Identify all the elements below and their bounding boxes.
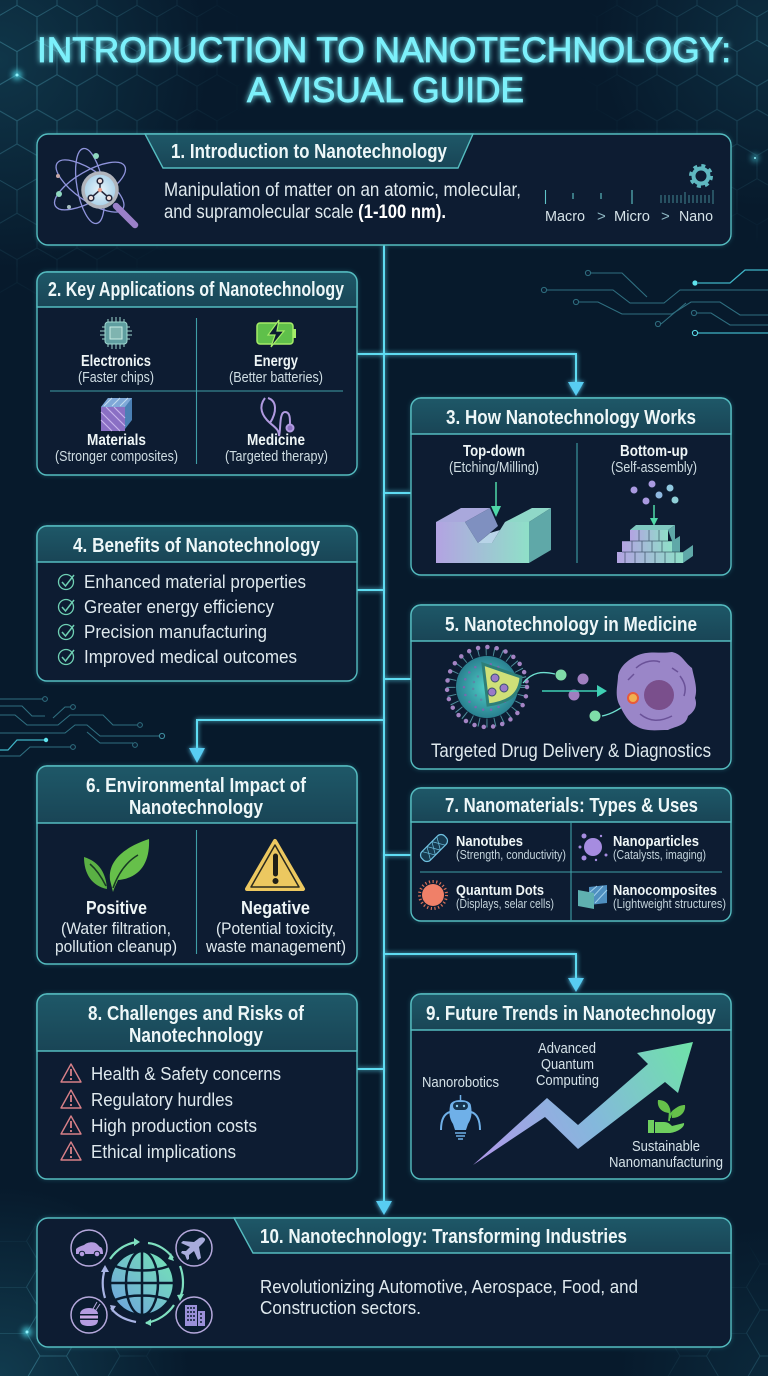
heading 1: 1. Introduction to Nanotechnology	[171, 141, 448, 163]
heading 2: 2. Key Applications of Nanotechnology	[48, 279, 345, 301]
sustainable nanomanufacturing: Nanomanufacturing	[609, 1154, 723, 1171]
circuit decoration: left	[0, 697, 165, 756]
energy: (Better batteries)	[229, 370, 323, 386]
trend arrow	[473, 1042, 693, 1165]
benefit 1: Enhanced material properties	[84, 571, 306, 592]
icon: hand and plant	[648, 1100, 685, 1133]
description: Revolutionizing Automotive, Aerospace, Food, and	[260, 1276, 638, 1297]
intro text	[164, 179, 521, 223]
heading 8	[37, 994, 357, 1051]
nanotubes: (Strength, conductivity)	[456, 848, 566, 862]
heading 7	[411, 788, 731, 822]
icon: warning triangle	[247, 841, 303, 889]
positive: pollution cleanup)	[55, 937, 177, 956]
icon: assembled bricks	[617, 480, 693, 563]
intro text: Manipulation of matter on an atomic, molecular,	[164, 179, 521, 201]
materials: Materials	[87, 432, 146, 449]
panel 4: benefits	[37, 526, 357, 681]
materials: (Stronger composites)	[55, 449, 178, 465]
nanotubes	[418, 832, 566, 864]
quantum dots: (Displays, selar cells)	[456, 897, 554, 911]
icon: target cell	[617, 652, 696, 730]
panel 2: key applications	[37, 272, 357, 475]
icon: chip	[100, 317, 132, 349]
risk 3: High production costs	[91, 1115, 257, 1136]
icon: nanoparticles	[578, 834, 608, 861]
bottom-up: (Self-assembly)	[611, 460, 697, 476]
heading 9	[411, 994, 731, 1030]
nanocomposites: (Lightweight structures)	[613, 897, 726, 911]
nanocomposites	[578, 883, 726, 911]
icon: globe with industries	[71, 1230, 212, 1333]
benefit 3: Precision manufacturing	[84, 621, 267, 642]
panel 9: future trends	[411, 994, 731, 1179]
icon: globe	[101, 1238, 184, 1326]
sustainable nanomanufacturing: Sustainable	[632, 1138, 700, 1155]
panel 5: medicine	[411, 605, 731, 769]
sustainable nanomanufacturing	[609, 1100, 723, 1171]
nanoparticles: Nanoparticles	[613, 834, 699, 850]
heading 2	[37, 272, 357, 307]
icon: nanocomposite sheets	[578, 885, 607, 909]
heading 4: 4. Benefits of Nanotechnology	[73, 535, 321, 557]
icon: stethoscope	[261, 398, 294, 436]
quantum computing label	[536, 1040, 599, 1089]
icon: leaves	[84, 839, 149, 892]
nanorobotics	[422, 1074, 499, 1139]
electronics	[78, 317, 154, 386]
medicine: (Targeted therapy)	[225, 449, 328, 465]
nanoparticles	[578, 834, 706, 862]
icon: food	[71, 1297, 107, 1333]
nanorobotics: Nanorobotics	[422, 1074, 499, 1091]
icon: car	[71, 1230, 107, 1266]
heading 7: 7. Nanomaterials: Types & Uses	[445, 795, 698, 817]
scale: macro micro nano: Macro	[545, 208, 585, 225]
risk 1: Health & Safety concerns	[91, 1063, 281, 1084]
intro text: and supramolecular scale (1-100 nm).	[164, 201, 446, 223]
nanoparticles: (Catalysts, imaging)	[613, 848, 706, 862]
negative: (Potential toxicity,	[216, 919, 336, 938]
icon: etched block	[436, 482, 551, 563]
panel 7: nanomaterials	[411, 788, 731, 921]
title	[37, 31, 731, 110]
negative: waste management)	[205, 937, 346, 956]
quantum computing label: Quantum	[541, 1056, 594, 1073]
panel 6: environmental impact	[37, 766, 357, 964]
quantum computing label: Advanced	[538, 1040, 596, 1057]
medicine: Medicine	[247, 432, 305, 449]
panel 8: challenges	[37, 994, 357, 1179]
negative	[205, 841, 346, 956]
heading 5: 5. Nanotechnology in Medicine	[445, 614, 697, 636]
positive: (Water filtration,	[61, 919, 171, 938]
nanocomposites: Nanocomposites	[613, 883, 717, 899]
positive	[55, 839, 177, 956]
heading 3	[411, 398, 731, 434]
negative: Negative	[241, 898, 310, 918]
heading 1	[145, 134, 473, 168]
top-down: Top-down	[463, 443, 525, 460]
heading 3: 3. How Nanotechnology Works	[446, 407, 696, 429]
heading 5	[411, 605, 731, 641]
scale: macro micro nano: >	[597, 208, 606, 225]
heading 8: Nanotechnology	[129, 1025, 264, 1047]
icon: composite cube	[101, 398, 132, 431]
quantum dots	[420, 882, 554, 911]
bottom-up	[611, 443, 697, 563]
icon: nanotube	[418, 832, 450, 864]
heading 4	[37, 526, 357, 562]
benefit 4: Improved medical outcomes	[84, 646, 297, 667]
panel 10: transforming industries	[37, 1218, 731, 1347]
benefit 2: Greater energy efficiency	[84, 596, 275, 617]
connectors	[189, 245, 584, 1215]
caption: Targeted Drug Delivery & Diagnostics	[431, 740, 711, 762]
title: INTRODUCTION TO NANOTECHNOLOGY:	[37, 31, 731, 70]
quantum dots: Quantum Dots	[456, 883, 544, 899]
title: A VISUAL GUIDE	[247, 71, 524, 110]
electronics: (Faster chips)	[78, 370, 154, 386]
heading 6	[37, 766, 357, 823]
heading 6: 6. Environmental Impact of	[86, 775, 306, 797]
icon: atom and magnifier	[48, 146, 135, 226]
heading 8: 8. Challenges and Risks of	[88, 1003, 304, 1025]
scale: macro micro nano: Micro	[614, 208, 650, 225]
heading 9: 9. Future Trends in Nanotechnology	[426, 1003, 717, 1025]
quantum computing label: Computing	[536, 1072, 599, 1089]
panel 3: how it works	[411, 398, 731, 575]
description	[260, 1276, 638, 1318]
heading 10	[234, 1218, 731, 1253]
circuit decoration: top right	[541, 270, 768, 336]
top-down	[436, 443, 551, 563]
energy: Energy	[254, 353, 298, 370]
panel 1: introduction	[37, 134, 731, 245]
energy	[229, 320, 323, 386]
risk 2: Regulatory hurdles	[91, 1089, 233, 1110]
scale: macro micro nano: >	[661, 208, 670, 225]
icon: gear	[690, 166, 712, 186]
materials	[55, 398, 178, 465]
positive: Positive	[86, 898, 147, 918]
risk 4: Ethical implications	[91, 1141, 236, 1162]
heading 10: 10. Nanotechnology: Transforming Industries	[260, 1226, 627, 1248]
top-down: (Etching/Milling)	[449, 460, 539, 476]
scale: macro micro nano: Nano	[679, 208, 713, 225]
description: Construction sectors.	[260, 1297, 421, 1318]
nanotubes: Nanotubes	[456, 834, 523, 850]
bottom-up: Bottom-up	[620, 443, 688, 460]
icon: battery	[257, 320, 296, 347]
heading 6: Nanotechnology	[129, 797, 264, 819]
icon: drug delivery nanoparticle	[447, 647, 631, 727]
icon: plane	[176, 1230, 212, 1266]
icon: buildings	[176, 1297, 212, 1333]
electronics: Electronics	[81, 353, 151, 370]
scale: macro micro nano	[545, 190, 713, 225]
icon: robot	[441, 1095, 480, 1139]
medicine	[225, 398, 328, 465]
icon: quantum dot	[420, 882, 446, 908]
